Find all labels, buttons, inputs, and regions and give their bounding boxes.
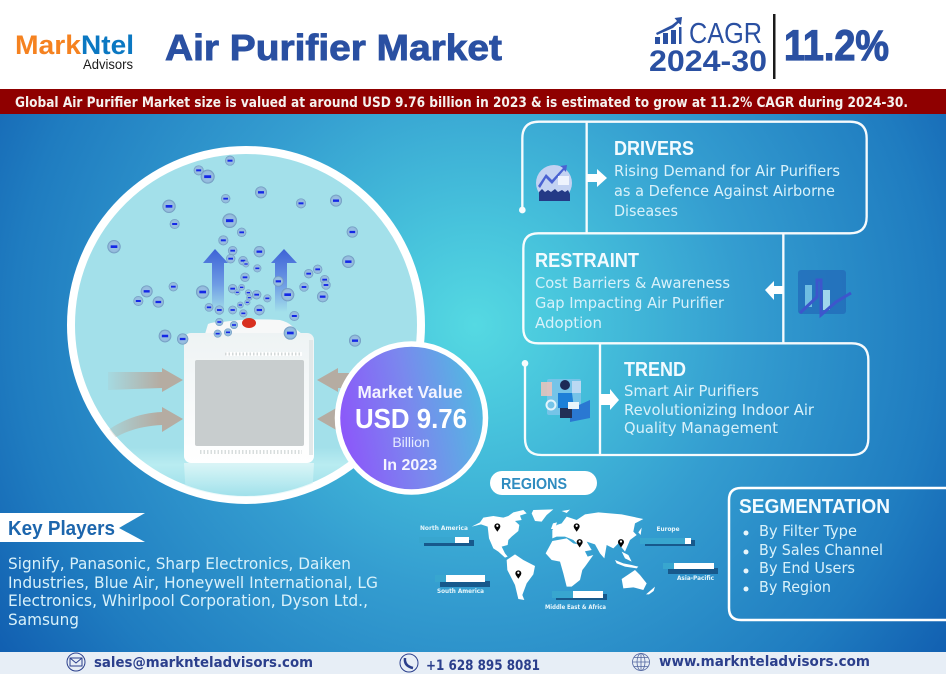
arrow: clean air up right <box>271 249 297 312</box>
logo: MarkNtel Advisors: Ntel <box>81 30 134 60</box>
key players list: Samsung <box>8 610 79 629</box>
reflection <box>184 463 314 498</box>
panel: drivers <box>536 138 840 220</box>
key players list <box>8 554 378 629</box>
key players list: Electronics, Whirlpool Corporation, Dyson Ltd., <box>8 591 368 610</box>
regions label <box>490 471 597 495</box>
market value badge: In 2023 <box>383 457 437 474</box>
region: middle east and africa: Middle East & Africa <box>545 604 606 611</box>
title: Air Purifier Market <box>165 27 502 68</box>
text: trend <box>624 383 815 437</box>
panel: restraint <box>535 250 851 332</box>
key players list: Signify, Panasonic, Sharp Electronics, Daiken <box>8 554 351 573</box>
arrow: clean air up left <box>203 249 228 312</box>
arrow: air intake bottom left <box>110 407 183 438</box>
text: trend: Smart Air Purifiers <box>624 383 759 400</box>
footer bar <box>0 652 946 674</box>
header background <box>0 0 946 90</box>
icon: person with dashboards <box>541 379 590 422</box>
panel: segmentation: SEGMENTATION <box>739 496 890 518</box>
market value badge: USD 9.76 <box>355 403 467 434</box>
icon: globe <box>632 654 650 670</box>
market value badge: Billion <box>392 434 430 450</box>
logo: MarkNtel Advisors <box>15 30 134 72</box>
region: south america: South America <box>437 588 484 595</box>
particles <box>107 156 361 347</box>
region: europe: Europe <box>656 526 680 533</box>
logo: MarkNtel Advisors: Advisors <box>83 57 133 72</box>
CAGR block <box>649 14 889 79</box>
heading: restraint: RESTRAINT <box>535 250 639 272</box>
text: restraint: Cost Barriers & Awareness <box>535 275 730 292</box>
region: middle east and africa <box>545 591 607 611</box>
region: asia-pacific: Asia-Pacific <box>677 575 714 582</box>
purifier body <box>184 318 314 463</box>
world map <box>472 509 655 600</box>
heading: trend: TREND <box>624 359 686 381</box>
region: europe <box>640 526 695 546</box>
text: drivers: Rising Demand for Air Purifiers <box>614 163 840 180</box>
icon: people with growth chart <box>536 165 572 201</box>
website: www.marknteladvisors.com <box>659 654 870 670</box>
hero image circle: air purifier <box>71 150 421 500</box>
text: drivers: Diseases <box>614 203 678 220</box>
CAGR block: CAGR <box>689 18 762 50</box>
text: restraint: Gap Impacting Air Purifier <box>535 295 725 312</box>
panel: segmentation: By Region <box>759 579 831 596</box>
logo: MarkNtel Advisors: Mark <box>15 30 82 60</box>
text: trend: Revolutionizing Indoor Air <box>624 402 815 419</box>
key players list: Industries, Blue Air, Honeywell International, LG <box>8 573 378 592</box>
icon: declining chart <box>798 270 851 315</box>
panel: segmentation: By End Users <box>759 560 855 577</box>
market value badge <box>338 344 486 492</box>
flow outline of drivers, restraint and trend panels <box>519 122 868 455</box>
banner <box>0 89 946 114</box>
panel: segmentation <box>729 488 946 620</box>
arrow: air intake top left <box>108 368 183 392</box>
icon: email <box>67 653 85 671</box>
key players ribbon <box>0 513 145 542</box>
arrow: right <box>600 389 619 410</box>
text: restraint <box>535 275 730 332</box>
phone: +1 628 895 8081 <box>426 658 540 674</box>
arrow: left <box>765 281 783 300</box>
panel: segmentation: By Sales Channel <box>759 542 883 559</box>
regions label: REGIONS <box>501 476 567 493</box>
text: restraint: Adoption <box>535 315 602 332</box>
email: sales@marknteladvisors.com <box>94 655 313 671</box>
panel: segmentation: By Filter Type <box>759 523 857 540</box>
main gradient background <box>0 114 946 652</box>
region: south america <box>435 575 490 595</box>
region: asia-pacific <box>663 563 718 582</box>
icon: growth chart <box>655 17 682 44</box>
CAGR block: 2024-30 <box>649 45 767 78</box>
text: trend: Quality Management <box>624 420 778 437</box>
panel: trend <box>541 359 815 437</box>
CAGR block: 11.2% <box>784 22 889 70</box>
text: drivers: as a Defence Against Airborne <box>614 183 835 200</box>
heading: drivers: DRIVERS <box>614 138 694 160</box>
arrow: air intake top right <box>317 368 350 392</box>
key players ribbon: Key Players <box>8 518 115 540</box>
region: north america <box>419 525 474 546</box>
icon: phone <box>400 654 418 672</box>
region: north america: North America <box>420 525 468 532</box>
market value badge: Market Value <box>358 382 463 402</box>
text: drivers <box>614 163 840 220</box>
arrow: right <box>587 169 607 187</box>
arrow: air intake bottom right <box>317 408 336 430</box>
